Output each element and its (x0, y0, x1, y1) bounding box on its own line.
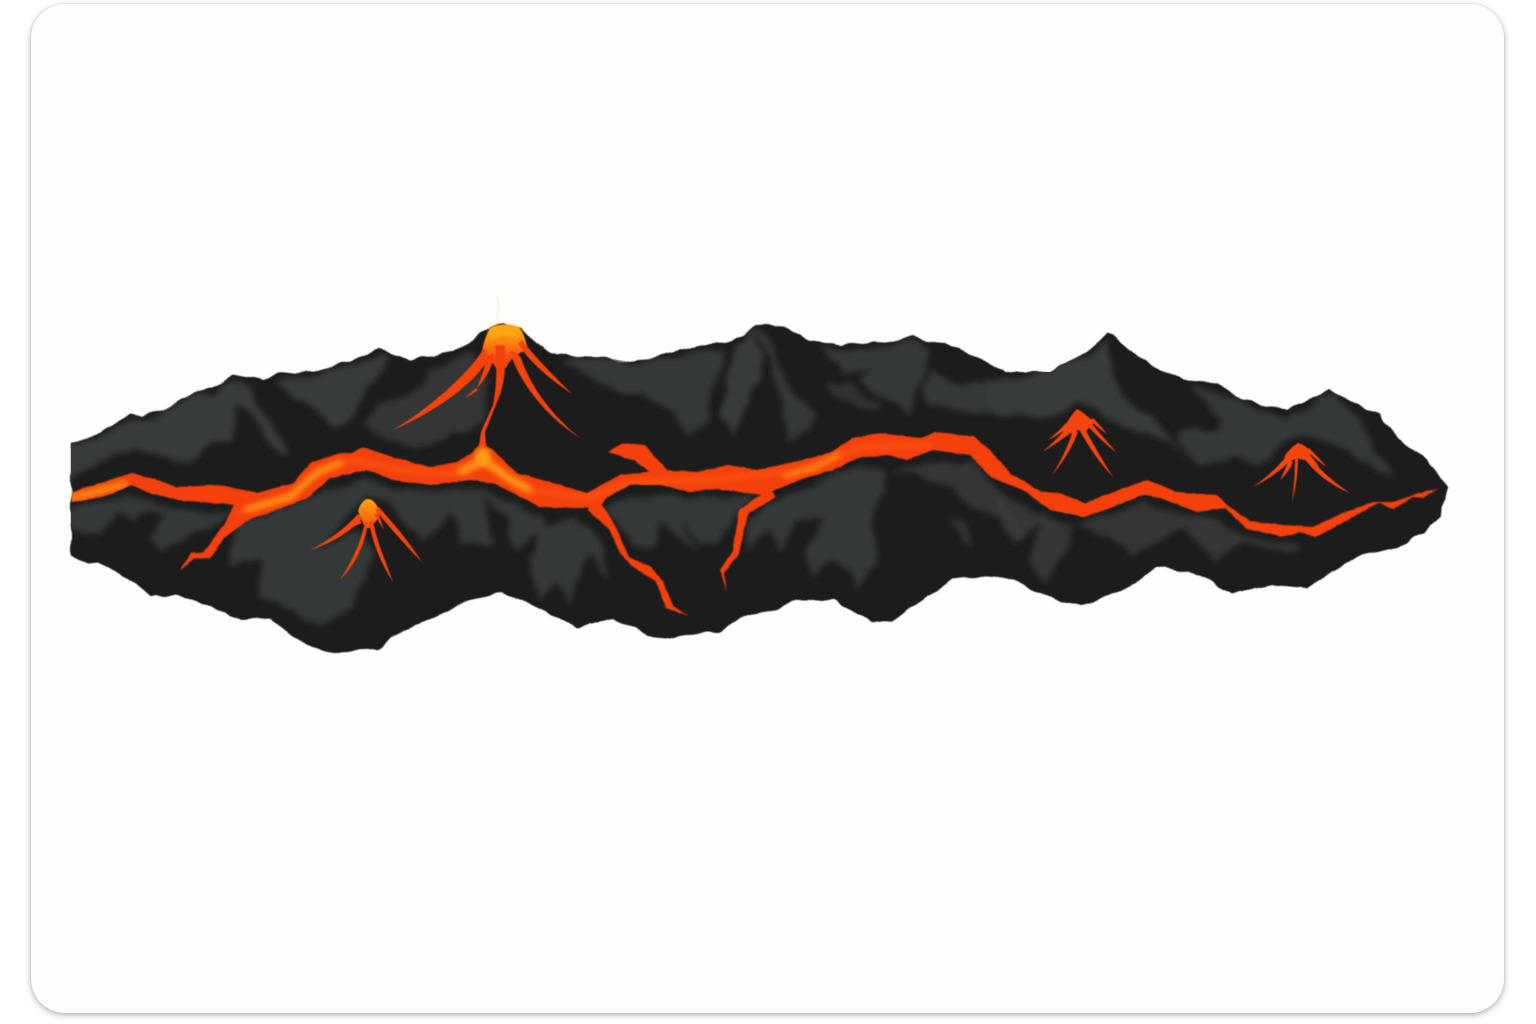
lava branch: centre down crack (720, 488, 776, 593)
ridge: lower right long slope (997, 490, 1297, 583)
ridge: top middle slope (560, 348, 725, 436)
volcano: lower left cone (310, 499, 422, 582)
ridge: lower left of branch (528, 516, 607, 603)
lava junction hot spot (475, 448, 491, 466)
mountain silhouette (71, 323, 1448, 652)
ridge: small slope blob (827, 380, 877, 412)
lava stream: right lower (510, 351, 580, 438)
ridge: main volcano left flank (360, 352, 487, 445)
lava stream: centre to river (479, 345, 505, 446)
ridge: far right peak (1177, 385, 1393, 480)
crater glow (489, 326, 521, 340)
ridge: small volcano mountain (225, 479, 545, 627)
ridge: shoulder before right peak (920, 370, 995, 415)
lava stream: second left (477, 352, 494, 388)
lava river network (72, 432, 1439, 616)
lava branch: lower left crack (180, 504, 245, 571)
ridge: lower centre basin (605, 493, 755, 553)
rock highlights: grey ridges (60, 329, 1393, 627)
crater fan (480, 325, 528, 368)
ridge: right of lower centre peak (899, 461, 1012, 535)
ridge: right of centre peak (817, 339, 928, 413)
ridge: small patch (952, 519, 971, 544)
lava branch: upper stub (608, 443, 670, 478)
lava glow: orange mid tone along channel (240, 445, 930, 512)
lava wisp (465, 388, 478, 398)
volcano: main erupting cone (393, 296, 580, 446)
volcano: right small cone (1042, 409, 1117, 477)
illustration: volcanic ridge (69, 296, 1450, 654)
ridge: far left peak (60, 378, 288, 485)
lava stream: long left (393, 348, 489, 430)
ridge: centre peak left prong (720, 329, 762, 438)
lava branch: long lower crack (588, 503, 689, 616)
lava glow: hot orange core (72, 455, 838, 509)
ridge: lower centre peak (747, 466, 887, 590)
ridge: right peak (984, 340, 1179, 450)
lava streams (310, 514, 363, 550)
ridge: centre peak right prong (757, 329, 817, 445)
ridge: lower far left (60, 496, 237, 550)
faint steam wisp (497, 296, 500, 322)
lava river: main channel (72, 432, 1439, 537)
volcano: far right small cone (1253, 443, 1350, 502)
ridge: second peak (270, 353, 385, 428)
crater fan (358, 499, 380, 528)
lava stream: right upper (518, 340, 572, 394)
